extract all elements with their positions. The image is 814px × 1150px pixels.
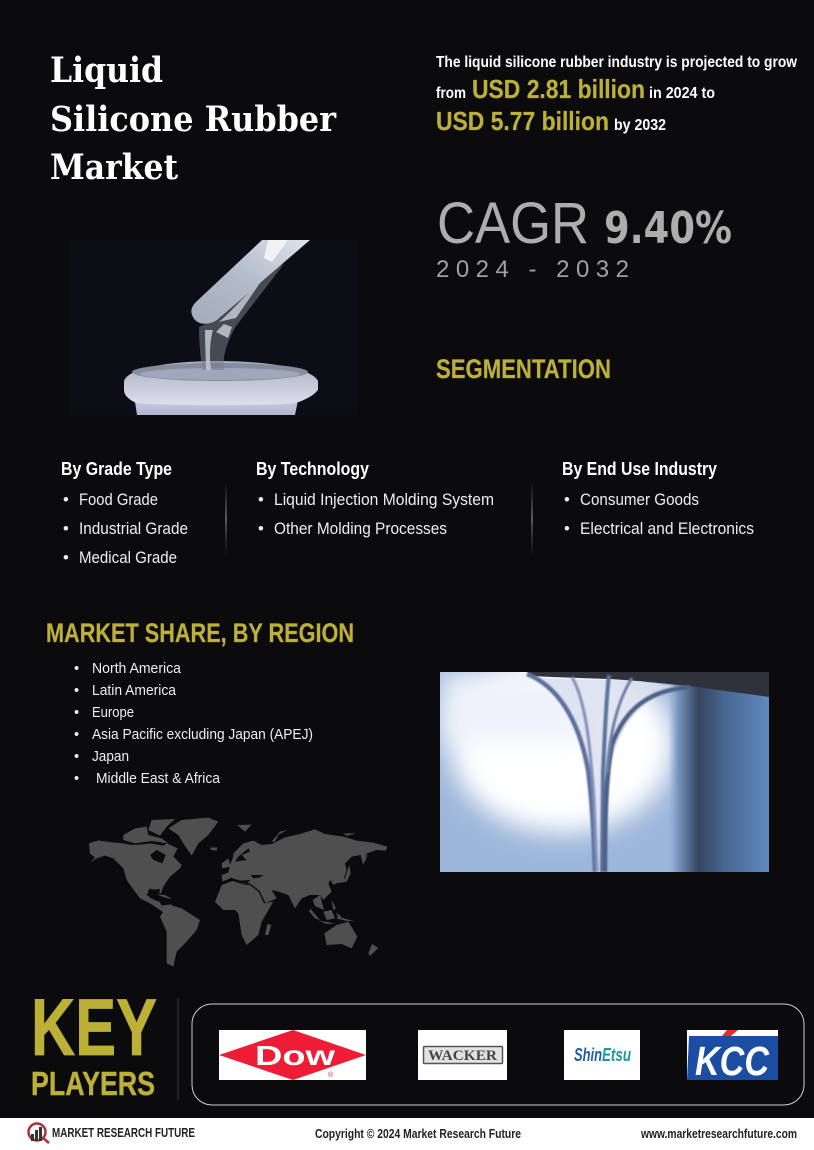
- Eurasia: [222, 829, 387, 908]
- map west: Americas and Greenland: [89, 818, 218, 967]
- bright backlight: [450, 657, 674, 833]
- market size statement: in 2024 to: [649, 85, 715, 102]
- heading: segmentation: SEGMENTATION: [436, 354, 611, 384]
- tub inner: [132, 363, 308, 381]
- Iceland: [210, 847, 217, 851]
- CAGR: CAGR: [437, 191, 589, 256]
- photo: silicone dripping from stick into tub: [69, 240, 357, 415]
- Hudson Bay: [150, 850, 166, 863]
- New Zealand: [368, 944, 378, 956]
- logo: Shin-Etsu: [564, 1030, 640, 1080]
- title: Silicone Rubber: [50, 99, 337, 140]
- segment: by technology: Other Molding Processes: [274, 520, 447, 538]
- segment: by grade type: Food Grade: [79, 491, 158, 509]
- North America: [89, 840, 182, 912]
- segment: by technology: •: [258, 520, 264, 538]
- Baltic: [235, 848, 250, 862]
- segment: by grade type: •: [63, 520, 69, 538]
- icon: market research future logo: [28, 1124, 49, 1143]
- copyright: Copyright © 2024 Market Research Future: [315, 1127, 521, 1141]
- market size statement: by 2032: [614, 117, 666, 134]
- silicone strands: [199, 264, 284, 370]
- stick: [191, 240, 310, 324]
- segment: by grade type: By Grade Type: [61, 459, 172, 479]
- segment: by end use industry: •: [564, 491, 570, 509]
- Greenland: [168, 818, 218, 856]
- logo: Dow: [219, 1030, 366, 1080]
- Southeast Asia: [309, 895, 355, 924]
- logo: Dow: Dow: [255, 1040, 335, 1071]
- footer: [0, 1118, 814, 1150]
- Madagascar: [265, 924, 271, 935]
- heading: key players: PLAYERS: [31, 1065, 155, 1102]
- segment: by end use industry: •: [564, 520, 570, 538]
- world map: [89, 818, 387, 967]
- market size statement: from: [436, 85, 466, 102]
- tub body: [134, 395, 299, 415]
- region list: •: [74, 705, 79, 721]
- market size statement: USD 2.81 billion: [472, 74, 645, 104]
- Sakhalin and Japan: [337, 833, 368, 883]
- footer brand: MARKET RESEARCH FUTURE: [52, 1125, 195, 1140]
- logo: Wacker: [418, 1030, 507, 1080]
- region list: Europe: [92, 705, 134, 721]
- stream body: [540, 678, 682, 872]
- nozzle: [527, 672, 769, 697]
- region list: [74, 661, 313, 787]
- Mediterranean: [230, 877, 250, 884]
- title: Liquid: [50, 50, 163, 91]
- segment: by technology: •: [258, 491, 264, 509]
- segment: by end use industry: By End Use Industry: [562, 459, 717, 479]
- region list: Latin America: [92, 683, 177, 699]
- region list: Asia Pacific excluding Japan (APEJ): [92, 727, 313, 743]
- segment: by grade type: Industrial Grade: [79, 520, 188, 538]
- region list: Middle East & Africa: [96, 771, 221, 787]
- Australia: [324, 922, 357, 948]
- stream lines: [527, 674, 690, 872]
- CAGR: [436, 191, 732, 283]
- segment: by technology: By Technology: [256, 459, 369, 479]
- Caribbean Sea: [158, 899, 172, 906]
- Novaya Zemlya: [272, 830, 287, 842]
- CAGR: 2024 - 2032: [436, 256, 629, 283]
- Gulf of Mexico: [148, 889, 160, 898]
- Arctic islands: [123, 819, 175, 843]
- region list: •: [74, 661, 79, 677]
- segment: by end use industry: Electrical and Electronics: [580, 520, 754, 538]
- heading: market share by region: MARKET SHARE, BY REGION: [46, 618, 354, 648]
- Africa: [215, 880, 273, 945]
- segment: by grade type: •: [63, 491, 69, 509]
- segment: by technology: [256, 459, 494, 538]
- segment: by end use industry: [562, 459, 754, 538]
- CAGR: 9.40%: [604, 203, 732, 254]
- region list: •: [74, 749, 79, 765]
- region list: Japan: [92, 749, 129, 765]
- market size statement: [436, 54, 797, 136]
- logo: Wacker: WACKER: [428, 1048, 498, 1064]
- Cuba: [157, 894, 172, 899]
- logo: Shin-Etsu: Etsu: [602, 1045, 631, 1065]
- Britain: [222, 858, 231, 868]
- map east: Eurasia, Africa, Oceania: [215, 825, 387, 956]
- heading: key players: KEY: [31, 983, 157, 1073]
- South America: [160, 904, 200, 967]
- segment: by grade type: [61, 459, 188, 567]
- region list: North America: [92, 661, 182, 677]
- Red Sea: [258, 890, 265, 903]
- region list: •: [74, 683, 79, 699]
- photo: silicone stream pouring: [440, 657, 769, 872]
- key players panel: [192, 1004, 804, 1105]
- dark right band: [668, 680, 769, 872]
- segment: by grade type: Medical Grade: [79, 549, 177, 567]
- logo: KCC: KCC: [695, 1038, 770, 1084]
- segment: by technology: Liquid Injection Molding System: [274, 491, 494, 509]
- region list: •: [74, 771, 79, 787]
- segment: by grade type: •: [63, 549, 69, 567]
- heading: key players: [31, 983, 157, 1102]
- segment: by end use industry: Consumer Goods: [580, 491, 699, 509]
- tub rim: [124, 361, 318, 405]
- title: Market: [50, 147, 178, 188]
- title: [50, 50, 337, 188]
- logo: Shin-Etsu: Shin: [574, 1045, 602, 1065]
- logo: Dow: ®: [328, 1071, 334, 1079]
- market size statement: USD 5.77 billion: [436, 106, 609, 136]
- Black Sea: [251, 875, 263, 878]
- region list: •: [74, 727, 79, 743]
- Svalbard: [237, 825, 252, 832]
